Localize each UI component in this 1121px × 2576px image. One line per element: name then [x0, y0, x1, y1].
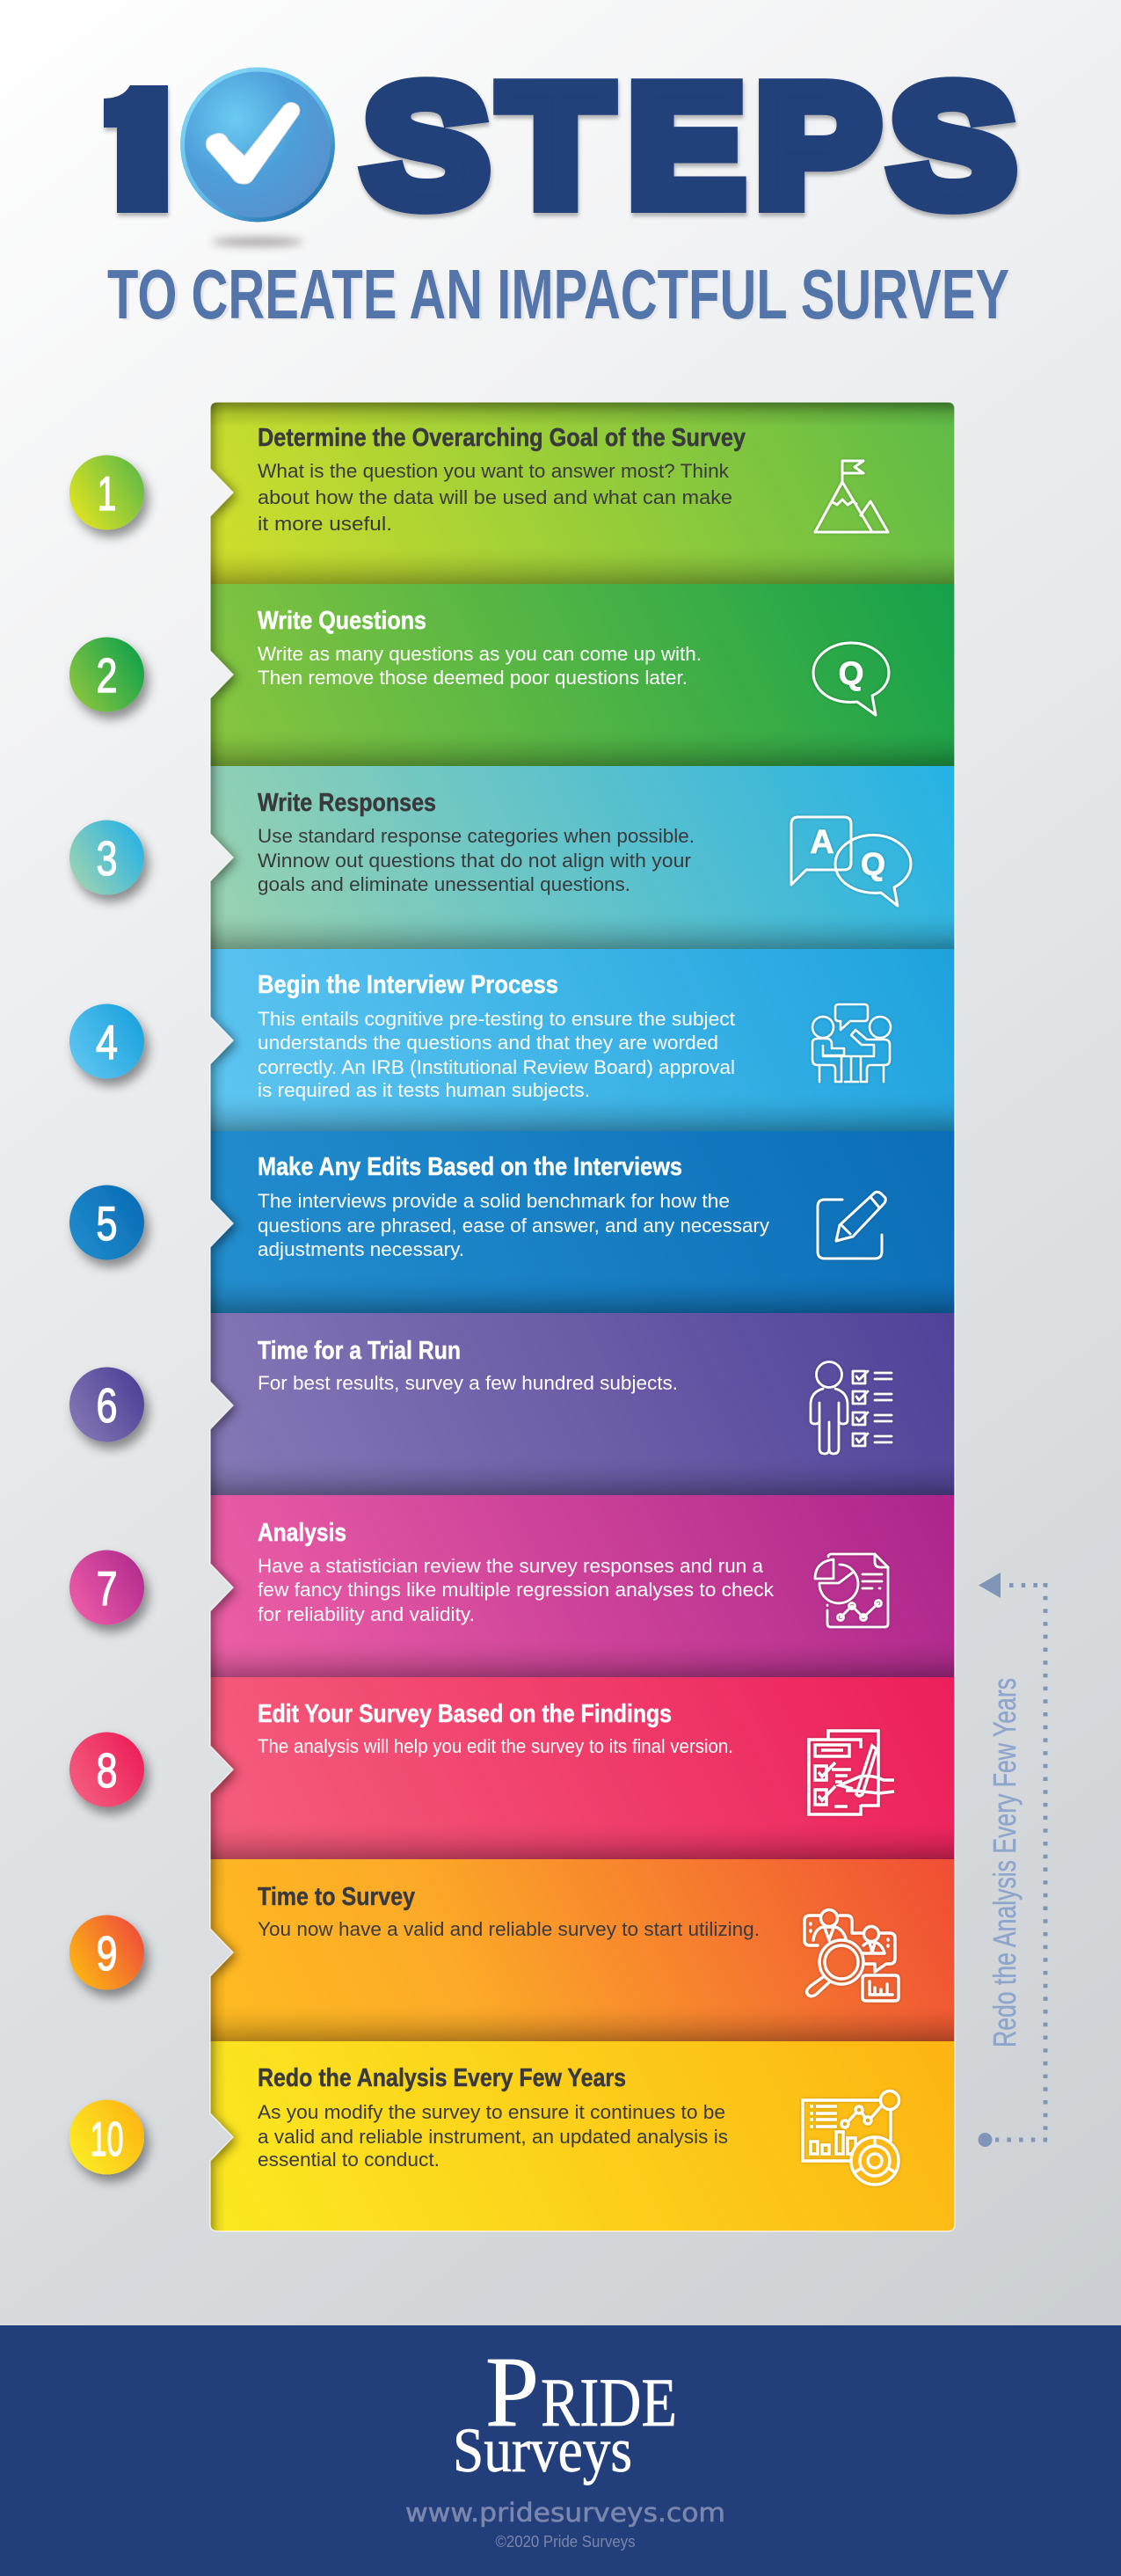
heading 4: Begin the Interview Process: [258, 971, 558, 999]
body 6: For best results, survey a few hundred subjects.: [258, 1372, 678, 1394]
badge 2: [69, 637, 144, 712]
band 3: [210, 766, 955, 949]
logo: Pride Surveys: RIDE: [541, 2364, 677, 2441]
word STEPS: S: [891, 50, 1015, 240]
body 5: adjustments necessary.: [258, 1238, 464, 1260]
body 3: Use standard response categories when possible.: [258, 825, 695, 847]
body 7: few fancy things like multiple regression analyses to check: [258, 1579, 775, 1601]
icon: checklist with hand and pen: [809, 1731, 894, 1814]
body 2: Then remove those deemed poor questions later.: [258, 667, 688, 689]
badge 10: 10: [90, 2112, 123, 2166]
body 2: [258, 643, 702, 689]
panel outline: [210, 402, 955, 2231]
body 10: [258, 2101, 728, 2171]
word STEPS: T: [501, 51, 610, 241]
badge 7: [69, 1550, 144, 1625]
body 1: [258, 460, 732, 535]
badge 4: 4: [96, 1015, 118, 1069]
logo: Pride Surveys: [453, 2336, 677, 2485]
badge 9: [69, 1916, 144, 1989]
badge 3: [69, 820, 144, 895]
copyright: ©2020 Pride Surveys: [496, 2533, 635, 2550]
body 7: for reliability and validity.: [258, 1603, 475, 1625]
body 4: correctly. An IRB (Institutional Review Board) approval: [258, 1056, 735, 1078]
body 5: questions are phrased, ease of answer, and any necessary: [258, 1215, 769, 1237]
panel: step 5: [69, 1131, 955, 1313]
panel: step 3: [69, 766, 955, 949]
logo: Pride Surveys: Surveys: [453, 2415, 632, 2485]
heading 6: Time for a Trial Run: [258, 1337, 461, 1365]
badge 8: [69, 1733, 144, 1806]
badge 8: 8: [97, 1743, 118, 1798]
heading 8: Edit Your Survey Based on the Findings: [258, 1700, 672, 1728]
body 3: goals and eliminate unessential questions.: [258, 873, 630, 895]
body 5: The interviews provide a solid benchmark for how the: [258, 1190, 730, 1212]
heading 2: Write Questions: [258, 607, 426, 635]
panel: step 1: [69, 402, 955, 584]
icon: pencil and square: [818, 1192, 885, 1259]
numeral 1: 1: [86, 45, 186, 246]
band 9: [210, 1859, 955, 2041]
body 4: This entails cognitive pre-testing to ensure the subject: [258, 1008, 735, 1030]
icon: report with charts: [815, 1554, 888, 1627]
panel: step 4: [69, 949, 955, 1131]
body 7: [258, 1555, 775, 1625]
body 4: understands the questions and that they are worded: [258, 1032, 718, 1054]
body 7: Have a statistician review the survey responses and run a: [258, 1555, 764, 1577]
body 8: The analysis will help you edit the survey to its final version.: [258, 1735, 733, 1757]
body 1: it more useful.: [258, 513, 392, 535]
badge 1: [69, 456, 144, 529]
heading 5: Make Any Edits Based on the Interviews: [258, 1153, 682, 1181]
footer: [0, 2325, 1121, 2576]
icon: person with checklist: [811, 1361, 892, 1454]
panel: step 10: [69, 2041, 955, 2231]
panel: step 7: [69, 1495, 955, 1677]
band 8: [210, 1677, 955, 1859]
band 10: [210, 2041, 955, 2231]
icon: check mark ball: [180, 67, 335, 246]
badge 5: [69, 1186, 144, 1259]
vertical label: Redo the Analysis Every Few Years: [986, 1678, 1023, 2047]
icon: mountain with flag: [815, 461, 888, 532]
body 3: [258, 825, 695, 895]
panel: step 8: [69, 1677, 955, 1859]
badge 6: 6: [97, 1378, 118, 1433]
body 10: essential to conduct.: [258, 2149, 440, 2171]
band 5: [210, 1131, 955, 1313]
badge 2: 2: [97, 648, 118, 703]
band 6: [210, 1313, 955, 1495]
panel: step 9: [69, 1859, 955, 2041]
heading 9: Time to Survey: [258, 1883, 415, 1911]
word STEPS: S: [364, 50, 488, 240]
word STEPS: P: [756, 50, 879, 240]
heading 3: Write Responses: [258, 789, 436, 817]
badge 10: [69, 2100, 144, 2174]
heading 7: Analysis: [258, 1519, 346, 1547]
band 4: [210, 949, 955, 1131]
word STEPS: [364, 50, 1015, 241]
body 1: about how the data will be used and what can make: [258, 486, 732, 508]
body 4: [258, 1008, 735, 1101]
body 9: You now have a valid and reliable survey to start utilizing.: [258, 1918, 760, 1940]
band 1: [210, 402, 955, 584]
icon: answer and question bubbles: Q: [861, 846, 885, 882]
badge 9: 9: [97, 1926, 118, 1981]
band 2: [210, 584, 955, 766]
title: 10 STEPS: [86, 45, 1015, 246]
badge 6: [69, 1367, 144, 1442]
badge 1: 1: [97, 466, 116, 521]
body 3: Winnow out questions that do not align with your: [258, 850, 691, 872]
icon: answer and question bubbles: [791, 817, 911, 906]
icon: question bubble: [813, 643, 889, 715]
body 10: a valid and reliable instrument, an updated analysis is: [258, 2126, 728, 2148]
icon: magnifier over people and chart: [804, 1910, 899, 2001]
badge 7: 7: [97, 1561, 118, 1616]
website: www.pridesurveys.com: [405, 2498, 725, 2528]
badge 3: 3: [97, 831, 118, 886]
word STEPS: E: [629, 52, 744, 241]
badge 5: 5: [97, 1196, 118, 1251]
heading 1: Determine the Overarching Goal of the Survey: [258, 424, 746, 452]
logo: Pride Surveys: P: [485, 2336, 539, 2448]
panel: step 2: [69, 584, 955, 766]
body 5: [258, 1190, 769, 1260]
body 10: As you modify the survey to ensure it continues to be: [258, 2101, 725, 2123]
body 4: is required as it tests human subjects.: [258, 1079, 590, 1101]
icon: answer and question bubbles: A: [810, 824, 834, 861]
icon: question bubble: Q: [839, 655, 863, 691]
panel: step 6: [69, 1313, 955, 1495]
body 2: Write as many questions as you can come up with.: [258, 643, 702, 665]
band 7: [210, 1495, 955, 1677]
icon: interview at table: [812, 1004, 891, 1082]
heading 10: Redo the Analysis Every Few Years: [258, 2064, 626, 2092]
arrow: redo loop: [978, 1573, 1047, 2147]
icon: dashboard with charts: [803, 2091, 899, 2185]
body 1: What is the question you want to answer most? Think: [258, 460, 730, 482]
badge 4: [69, 1004, 144, 1078]
